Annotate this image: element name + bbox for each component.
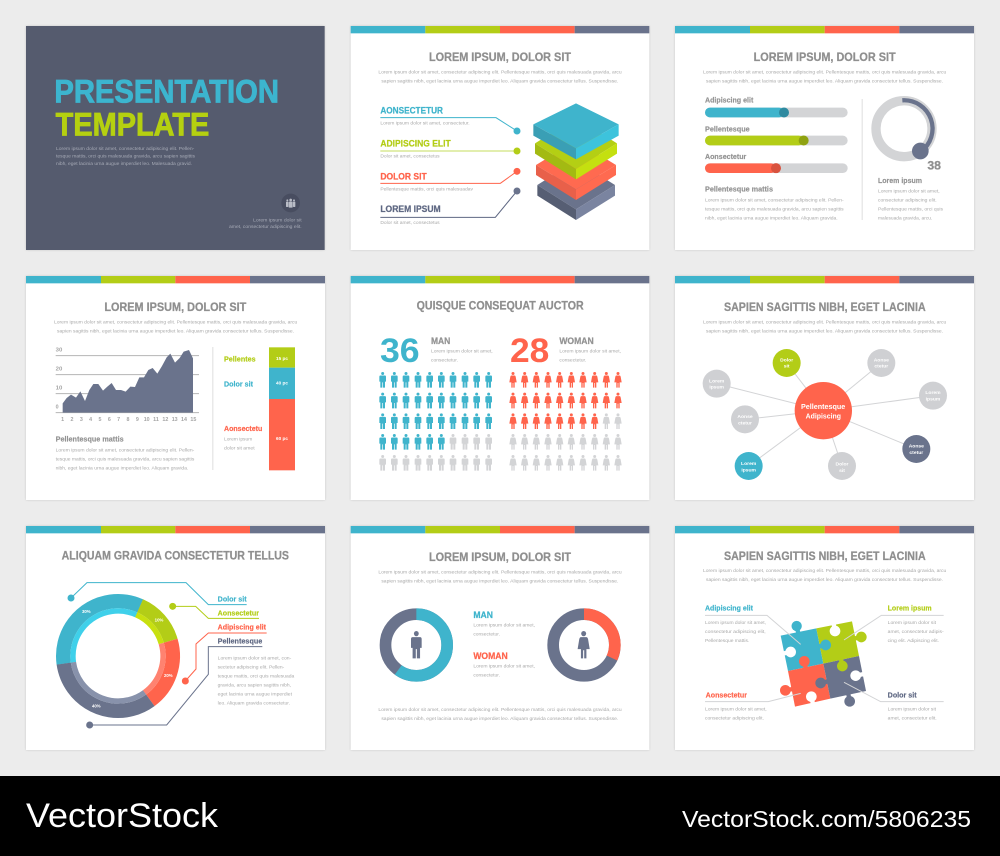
callout: adipiscing elit: Adipiscing elit <box>705 603 754 612</box>
area chart: 3 <box>80 417 83 423</box>
callout: dolor sit: Pellentesque mattis, orci quis malesuadav <box>380 187 474 192</box>
area chart: 1 <box>61 417 64 423</box>
slide: hub and spoke diagram <box>675 276 974 500</box>
area chart <box>56 348 199 423</box>
node: lorem ipsum blue: ipsum <box>741 467 757 473</box>
intro text <box>378 69 622 83</box>
hub: pellentesque adipiscing <box>795 382 852 439</box>
heading: LOREM IPSUM, DOLOR SIT <box>104 300 247 314</box>
callout: aonsectetur <box>380 105 520 134</box>
stacked bar labels: Dolor sit <box>224 379 254 388</box>
progress bar: aonsectetur: Aonsectetur <box>705 152 746 161</box>
body text: Lorem ipsum dolor sit amet, con- <box>218 656 292 661</box>
area chart: 5 <box>99 417 102 423</box>
intro text <box>378 569 622 583</box>
area chart: 8 <box>127 417 130 423</box>
node: lorem ipsum left: Lorem <box>709 378 725 384</box>
footer text: sapien sagittis nibh, eget lacinia urna augue imperdiet leo. Aliquam gravida consectetur tellus. Suspendisse. <box>381 716 618 721</box>
isometric layer stack <box>533 103 619 220</box>
stat: 28 woman: WOMAN <box>559 336 594 346</box>
intro text: Lorem ipsum dolor sit amet, consectetur adipiscing elit. Pellentesque mattis, orci quis malesuada gravida, arcu <box>378 569 622 574</box>
donut chart: 20% <box>164 673 173 678</box>
callout: adipiscing elit <box>182 623 267 684</box>
progress bar: adipiscing elit <box>705 96 848 117</box>
callout: dolor sit: Dolor sit <box>888 690 917 699</box>
stacked bar: 15 pc <box>276 356 288 361</box>
stat: 36 man: 36 <box>380 332 420 370</box>
slide: progress bars <box>675 26 974 250</box>
intro text: Lorem ipsum dolor sit amet, consectetur adipiscing elit. Pellentesque mattis, orci quis malesuada gravida, arcu <box>703 69 947 74</box>
hub connectors <box>717 363 933 466</box>
text block: pellentesque mattis: nibh, eget lacinia urna augue imperdiet leo. Aliquam gravida. <box>705 216 838 221</box>
text block: pellentesque mattis: Lorem ipsum dolor sit amet, consectetur adipiscing elit. Pellen- <box>56 448 195 453</box>
area chart: 12 <box>162 417 168 423</box>
intro text: Lorem ipsum dolor sit amet, consectetur adipiscing elit. Pellentesque mattis, orci quis malesuada gravida, arcu <box>54 319 298 324</box>
footer band <box>0 776 1000 856</box>
slide: man and woman donuts <box>351 526 649 750</box>
stacked bar labels <box>224 355 262 451</box>
area chart: 4 <box>89 417 92 423</box>
callout: pellentesque: Pellentesque <box>218 636 262 645</box>
callout: aonsectetur <box>705 690 801 720</box>
text block: lorem ipsum: Lorem ipsum dolor sit amet, <box>878 189 940 194</box>
callout: dolor sit: amet, consectetur elit. <box>888 715 937 720</box>
area chart: 0 <box>56 405 59 411</box>
intro text: sapien sagittis nibh, eget lacinia urna augue imperdiet leo. Aliquam gravida consectetur tellus. Suspendisse. <box>381 578 618 583</box>
callout: aonsectetur: consectetur adipiscing elit. <box>705 715 764 720</box>
stat: 28 woman <box>510 332 621 370</box>
text block: pellentesque mattis: Pellentesque mattis <box>705 184 773 193</box>
cover title: PRESENTATION <box>54 74 279 110</box>
colour header bar <box>675 26 974 33</box>
node: aonsectetur dark: ctetur <box>909 450 923 456</box>
node: dolor sit green <box>773 349 801 377</box>
colour header bar <box>26 276 325 283</box>
hub: pellentesque adipiscing: Adipiscing <box>806 411 841 420</box>
progress bar: adipiscing elit: Adipiscing elit <box>705 96 754 105</box>
node: aonsectetur dark <box>902 435 930 463</box>
text block: pellentesque mattis: tesque mattis, orci quis malesuada gravida, arcu sapien sagittis <box>56 457 195 462</box>
cover footer text <box>229 217 302 229</box>
node: dolor sit green: Dolor <box>780 358 793 364</box>
man and woman legend: Lorem ipsum dolor sit amet, <box>473 664 535 669</box>
stat: 36 man: MAN <box>431 336 450 346</box>
text block: lorem ipsum <box>878 176 944 221</box>
callout: adipiscing elit: ADIPISCING ELIT <box>380 138 451 148</box>
colour header bar <box>675 276 974 283</box>
cover body text: tesque mattis, orci quis malesuada gravida, arcu sapien sagittis <box>56 154 196 159</box>
text block: pellentesque mattis: nibh, eget lacinia urna augue imperdiet leo. Aliquam gravida. <box>56 466 188 471</box>
callout: aonsectetur <box>169 603 259 618</box>
callout: lorem ipsum: Lorem ipsum dolor sit <box>888 620 937 625</box>
stacked bar labels: dolor sit amet <box>224 446 255 451</box>
node: aonsectetur top: Aonse <box>874 358 889 364</box>
puzzle graphic <box>780 621 867 707</box>
area chart: 10 <box>56 386 62 392</box>
callout: pellentesque <box>86 636 262 728</box>
intro text: sapien sagittis nibh, eget lacinia urna augue imperdiet leo. Aliquam gravida consectetur tellus. Suspendisse. <box>57 328 294 333</box>
cover body text <box>56 146 196 166</box>
intro text <box>54 319 298 333</box>
cover title: TEMPLATE <box>56 106 209 142</box>
node: aonsectetur left: Aonse <box>737 414 753 420</box>
callout: aonsectetur: AONSECTETUR <box>380 105 443 115</box>
cover body text: nibh, eget lacinia urna augue imperdiet leo. Malesuada gravid. <box>56 161 192 166</box>
colour header bar <box>351 26 649 33</box>
callout: aonsectetur: Aonsectetur <box>218 609 259 618</box>
intro text <box>703 69 947 83</box>
area chart: 9 <box>136 417 139 423</box>
heading: LOREM IPSUM, DOLOR SIT <box>754 50 896 64</box>
node: lorem ipsum left <box>703 370 731 398</box>
slide: segmented donut <box>26 526 325 750</box>
pictogram grid: women <box>509 372 622 471</box>
colour header bar <box>675 526 974 533</box>
node: dolor sit grey: sit <box>839 468 845 474</box>
callout: dolor sit <box>380 168 520 192</box>
node: lorem ipsum right <box>919 382 947 410</box>
callout: adipiscing elit: Adipiscing elit <box>218 623 267 632</box>
area chart: 15 <box>190 417 196 423</box>
heading: ALIQUAM GRAVIDA CONSECTETUR TELLUS <box>62 548 289 562</box>
intro text <box>703 319 947 333</box>
colour header bar <box>26 526 325 533</box>
area chart: 7 <box>117 417 120 423</box>
body text <box>218 656 295 706</box>
intro text: sapien sagittis nibh, eget lacinia urna augue imperdiet leo. Aliquam gravida consectetur tellus. Suspendisse. <box>381 78 618 83</box>
slide: puzzle <box>675 526 974 750</box>
heading: SAPIEN SAGITTIS NIBH, EGET LACINIA <box>724 549 926 563</box>
footer text: Lorem ipsum dolor sit amet, consectetur adipiscing elit. Pellentesque mattis, orci quis malesuada gravida, arcu <box>378 707 622 712</box>
text block: lorem ipsum: malesuada gravida, arcu. <box>878 216 932 221</box>
text block: pellentesque mattis: Pellentesque mattis <box>56 434 124 443</box>
callout: lorem ipsum: LOREM IPSUM <box>380 204 441 214</box>
node: lorem ipsum right: ipsum <box>926 396 941 402</box>
footer band: VectorStock <box>26 797 219 835</box>
stacked bar labels: Aonsectetu <box>224 424 262 433</box>
slide: presentation template cover <box>26 26 325 250</box>
man and woman legend: WOMAN <box>473 651 508 661</box>
callout: aonsectetur: Aonsectetur <box>706 690 747 699</box>
stat: 28 woman: Lorem ipsum dolor sit amet, <box>559 349 621 354</box>
man and woman legend: MAN <box>473 610 493 620</box>
donut chart: 30% <box>82 609 91 614</box>
body text: leo. Aliquam gravida consectetur. <box>218 701 290 706</box>
pictogram grid: men <box>379 372 492 471</box>
donut chart: 40% <box>92 703 101 708</box>
body text: gravida, arcu sapien sagittis nibh, <box>218 683 291 688</box>
stacked bar labels: Pellentes <box>224 355 256 364</box>
intro text: Lorem ipsum dolor sit amet, consectetur adipiscing elit. Pellentesque mattis, orci quis malesuada gravida, arcu <box>703 319 947 324</box>
footer band: VectorStock.com/5806235 <box>682 806 971 832</box>
callout: lorem ipsum: amet, consectetur adipis- <box>888 629 944 634</box>
radial gauge 38 <box>876 100 941 173</box>
text block: lorem ipsum: consectetur adipiscing elit. <box>878 198 937 203</box>
donut chart <box>41 579 195 733</box>
heading: QUISQUE CONSEQUAT AUCTOR <box>417 298 584 312</box>
slide: area chart and stacked bar <box>26 276 325 500</box>
node: dolor sit grey: Dolor <box>835 462 849 468</box>
callout: adipiscing elit: consectetur adipiscing elit, <box>705 629 766 634</box>
colour header bar <box>351 526 649 533</box>
body text: tesque mattis, orci quis malesuada <box>218 674 295 679</box>
progress bar: pellentesque <box>705 124 848 145</box>
text block: pellentesque mattis <box>56 434 195 471</box>
donut: man <box>385 614 447 676</box>
callout: aonsectetur: Lorem ipsum dolor sit amet, consectetur. <box>380 121 470 126</box>
node: aonsectetur dark: Aonse <box>909 444 924 450</box>
stacked bar: 60 pc <box>276 436 288 441</box>
callout: lorem ipsum: Lorem ipsum <box>888 603 932 612</box>
colour header bar <box>351 276 649 283</box>
footer text <box>378 707 622 721</box>
radial gauge 38: 38 <box>927 159 941 173</box>
man and woman legend: consectetur. <box>473 673 500 678</box>
callout: dolor sit: Dolor sit <box>218 595 247 604</box>
stacked bar labels: Lorem ipsum <box>224 437 252 442</box>
progress bar: pellentesque: Pellentesque <box>705 124 750 133</box>
area chart: 11 <box>153 417 159 423</box>
text block: pellentesque mattis <box>705 184 844 221</box>
callout: adipiscing elit <box>380 138 520 159</box>
area chart: 30 <box>56 348 62 354</box>
heading: LOREM IPSUM, DOLOR SIT <box>429 50 572 64</box>
area chart: 10 <box>144 417 150 423</box>
heading: SAPIEN SAGITTIS NIBH, EGET LACINIA <box>724 300 926 314</box>
area chart: 2 <box>71 417 74 423</box>
intro text: Lorem ipsum dolor sit amet, consectetur adipiscing elit. Pellentesque mattis, orci quis malesuada gravida, arcu <box>378 69 622 74</box>
callout: adipiscing elit <box>705 603 801 644</box>
cover title <box>54 74 279 142</box>
text block: lorem ipsum: Lorem ipsum <box>878 176 922 185</box>
node: lorem ipsum blue: Lorem <box>741 461 757 467</box>
area chart: 6 <box>108 417 111 423</box>
progress bar: aonsectetur <box>705 152 848 173</box>
intro text: sapien sagittis nibh, eget lacinia urna augue imperdiet leo. Aliquam gravida consectetur tellus. Suspendisse. <box>706 78 943 83</box>
man and woman legend: consectetur. <box>473 632 500 637</box>
text block: lorem ipsum: Pellentesque mattis, orci quis <box>878 207 944 212</box>
callout: dolor sit <box>67 583 247 605</box>
callout: aonsectetur: Lorem ipsum dolor sit amet, <box>705 706 767 711</box>
node: dolor sit green: sit <box>784 364 790 370</box>
hub: pellentesque adipiscing: Pellentesque <box>801 402 845 411</box>
callout: lorem ipsum <box>844 603 944 643</box>
donut: woman <box>553 614 615 676</box>
man and woman legend <box>473 610 535 678</box>
intro text: sapien sagittis nibh, eget lacinia urna augue imperdiet leo. Aliquam gravida consectetur tellus. Suspendisse. <box>706 577 943 582</box>
cover footer text: Lorem ipsum dolor sit <box>253 217 302 222</box>
body text: sectetur adipiscing elit. Pellen- <box>218 665 285 670</box>
callout: lorem ipsum: cing elit. Adipiscing elit. <box>888 638 939 643</box>
text block: pellentesque mattis: tesque mattis, orci quis malesuada gravida, arcu sapien sagittis <box>705 207 844 212</box>
stacked bar: 40 pc <box>276 381 288 386</box>
stacked bar <box>269 347 295 470</box>
callout: dolor sit: Lorem ipsum dolor sit <box>888 706 937 711</box>
area chart: 13 <box>172 417 178 423</box>
body text: eget lacinia urna augue imperdiet <box>218 692 293 697</box>
stat: 36 man: consectetur. <box>431 358 458 363</box>
node: aonsectetur top <box>867 349 895 377</box>
node: aonsectetur top: ctetur <box>874 364 888 370</box>
node: lorem ipsum blue <box>735 452 763 480</box>
area chart: 20 <box>56 367 62 373</box>
area chart: 14 <box>181 417 187 423</box>
callout: dolor sit <box>844 682 944 720</box>
intro text: sapien sagittis nibh, eget lacinia urna augue imperdiet leo. Aliquam gravida consectetur tellus. Suspendisse. <box>706 328 943 333</box>
node: aonsectetur left: ctetur <box>738 420 752 426</box>
stat: 36 man: Lorem ipsum dolor sit amet, <box>431 349 493 354</box>
callout: dolor sit: DOLOR SIT <box>380 171 427 181</box>
callout: adipiscing elit: Pellentesque mattis. <box>705 638 749 643</box>
node: dolor sit grey <box>828 452 856 480</box>
node: lorem ipsum right: Lorem <box>925 390 941 396</box>
callout: lorem ipsum <box>380 187 520 225</box>
cover body text: Lorem ipsum dolor sit amet, consectetur adipiscing elit. Pellen- <box>56 146 195 151</box>
callout: adipiscing elit: Dolor sit amet, consectetus <box>380 154 440 159</box>
callout: lorem ipsum: Dolor sit amet, consectetus <box>380 220 440 225</box>
text block: pellentesque mattis: Lorem ipsum dolor sit amet, consectetur adipiscing elit. Pellen- <box>705 198 844 203</box>
cover footer text: amet, consectetur adipiscing elit. <box>229 224 302 229</box>
intro text: Lorem ipsum dolor sit amet, consectetur adipiscing elit. Pellentesque mattis, orci quis malesuada gravida, arcu <box>703 568 947 573</box>
slide: people pictograms <box>351 276 649 500</box>
stat: 28 woman: consectetur. <box>559 358 586 363</box>
donut chart: 10% <box>155 617 163 622</box>
heading: LOREM IPSUM, DOLOR SIT <box>429 550 572 564</box>
node: aonsectetur left <box>731 405 759 433</box>
intro text <box>703 568 947 582</box>
callout: adipiscing elit: Lorem ipsum dolor sit amet, <box>705 620 766 625</box>
slide: layered stack <box>351 26 649 250</box>
node: lorem ipsum left: ipsum <box>709 385 725 391</box>
stat: 28 woman: 28 <box>510 332 549 370</box>
stat: 36 man <box>380 332 493 370</box>
man and woman legend: Lorem ipsum dolor sit amet, <box>473 623 535 628</box>
icon: people badge <box>281 194 300 212</box>
